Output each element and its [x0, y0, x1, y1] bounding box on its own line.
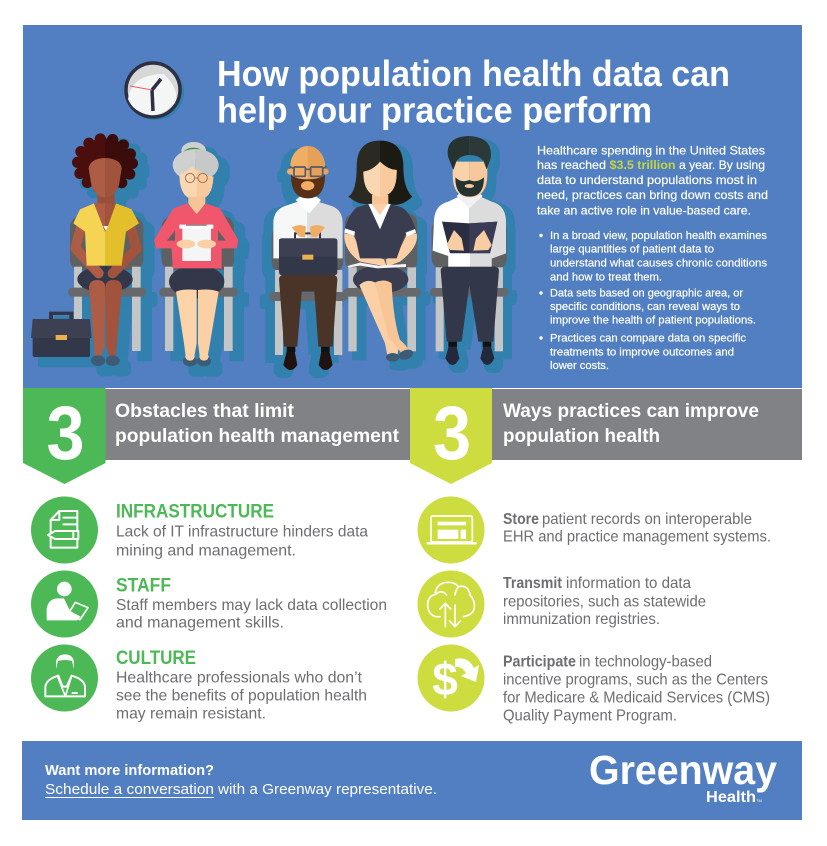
badge: green number 3 [23, 388, 106, 484]
text: transmit [503, 575, 706, 628]
heading: obstacles [115, 400, 399, 447]
text: participate: Participate [503, 654, 576, 670]
text block: healthcare spending intro: need, practices can bring down costs and [537, 188, 768, 202]
title: help your practice perform [217, 90, 652, 130]
text: call to action: Schedule a conversation [45, 781, 214, 798]
text: transmit: information to data [566, 575, 691, 592]
text: staff obstacle: Staff members may lack data collection [116, 597, 387, 614]
bullet list: population health facts: improve the health of patient populations. [550, 314, 756, 326]
icon: healthcare professional [31, 644, 98, 712]
icon: staff member with tablet [31, 570, 98, 638]
bullet list: population health facts: specific conditions, can reveal ways to [550, 301, 740, 313]
bullet list: population health facts: treatments to improve outcomes and [550, 346, 734, 358]
title [217, 53, 730, 130]
text: transmit: Transmit [503, 575, 563, 592]
text: participate: in technology-based [579, 654, 712, 670]
text: participate: Quality Payment Program. [503, 708, 677, 724]
text: culture obstacle: may remain resistant. [116, 706, 266, 722]
bullet list: population health facts [539, 230, 768, 372]
text block: healthcare spending intro: a year. By using [679, 158, 765, 172]
figure: woman in navy dress with magazine [343, 141, 427, 368]
illustration: seated patients in waiting room [31, 133, 514, 375]
text: store: Store [503, 511, 539, 528]
panel: gray section header bar [105, 389, 802, 460]
figure: bald man holding briefcase [263, 146, 347, 375]
icon: dollar with arrow: $ [432, 653, 458, 705]
text: infrastructure obstacle [116, 502, 368, 560]
bullet list: population health facts: In a broad view, population health examines [550, 230, 767, 242]
logo: Greenway Health: Health [706, 789, 756, 806]
badge: lime number 3 [410, 388, 492, 484]
text: infrastructure obstacle: mining and management. [116, 542, 296, 560]
text block: healthcare spending intro: has reached [537, 158, 606, 172]
icon: cloud data transfer [418, 570, 484, 638]
text: call to action: with a Greenway representative. [217, 781, 437, 798]
title: How population health data can [217, 53, 730, 94]
text: transmit: repositories, such as statewide [503, 594, 706, 610]
text: culture obstacle: CULTURE [116, 648, 196, 669]
icon: wall clock [126, 63, 184, 120]
text: staff obstacle [116, 576, 387, 632]
heading: obstacles: Obstacles that limit [115, 400, 294, 422]
text: infrastructure obstacle: Lack of IT infrastructure hinders data [116, 524, 368, 540]
panel: blue hero background [23, 25, 802, 388]
panel: call to action footer [22, 741, 802, 820]
badge: green number 3: 3 [46, 391, 84, 476]
text: culture obstacle [116, 648, 367, 722]
bullet list: population health facts: Practices can compare data on specific [550, 332, 747, 344]
badge: lime number 3: 3 [433, 391, 471, 476]
bullet list: population health facts: large quantities of patient data to [550, 244, 714, 256]
bullet list: population health facts: and how to treat them. [550, 272, 662, 284]
figure: woman in yellow blouse with briefcase [31, 133, 154, 373]
icon: infrastructure document and pencil [31, 496, 98, 564]
text: call to action [45, 762, 437, 798]
bullet list: population health facts: understand what causes chronic conditions [550, 258, 768, 270]
heading: ways to improve: population health [503, 425, 660, 447]
heading: ways to improve: Ways practices can improve [503, 400, 759, 422]
heading: ways to improve [503, 400, 759, 447]
text block: healthcare spending intro: data to understand populations most in [537, 173, 757, 187]
text: participate [503, 654, 770, 724]
icon: laptop with records [418, 496, 484, 564]
text: staff obstacle: STAFF [116, 576, 171, 596]
text: store: EHR and practice management systems. [503, 528, 771, 546]
text: participate: for Medicare & Medicaid Services (CMS) [503, 690, 770, 706]
text: call to action: Want more information? [45, 762, 214, 779]
heading: obstacles: population health management [115, 425, 399, 447]
logo: Greenway Health: Greenway [589, 747, 777, 793]
text: store [503, 511, 771, 546]
text: infrastructure obstacle: INFRASTRUCTURE [116, 502, 274, 522]
figure: bearded man reading a book [430, 136, 514, 370]
text block: healthcare spending intro: Healthcare spending in the United States [537, 144, 765, 158]
text block: healthcare spending intro: $3.5 trillion [610, 158, 676, 172]
bullet list: population health facts: Data sets based on geographic area, or [550, 288, 743, 300]
text: culture obstacle: Healthcare professionals who don’t [116, 670, 363, 686]
text: staff obstacle: and management skills. [116, 614, 284, 632]
text block: healthcare spending intro [537, 144, 768, 218]
figure: older woman in pink with clipboard [154, 142, 247, 374]
text: transmit: immunization registries. [503, 611, 660, 628]
text block: healthcare spending intro: take an active role in value-based care. [537, 204, 751, 218]
text: store: patient records on interoperable [542, 511, 752, 528]
text: participate: incentive programs, such as the Centers [503, 672, 768, 688]
logo: Greenway Health: TM [756, 798, 762, 803]
bullet list: population health facts: lower costs. [550, 360, 609, 372]
icon: dollar with arrow [418, 644, 484, 712]
text: culture obstacle: see the benefits of population health [116, 688, 367, 704]
